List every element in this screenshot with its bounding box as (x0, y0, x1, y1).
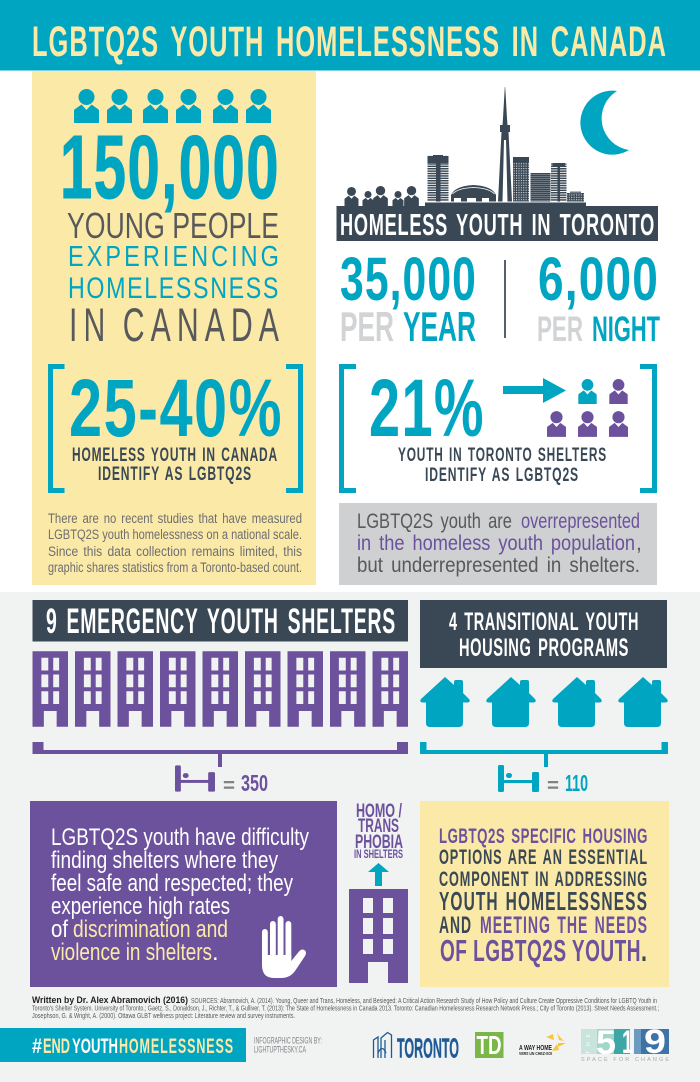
text block: experience high rates (51, 893, 230, 920)
callout: overrepresented (339, 503, 657, 585)
text block: data note: There are no recent studies that have measured (48, 511, 302, 526)
arrow (503, 378, 566, 403)
text: TORONTO (397, 1032, 459, 1064)
heading (32, 600, 408, 642)
stat: 35,000 per year: 35,000 (340, 245, 477, 313)
bed count: 110: 110 (565, 770, 588, 796)
big number: 150,000: 150,000 (60, 118, 280, 218)
icon: bed (175, 765, 215, 792)
text: experiencing: EXPERIENCING (68, 241, 282, 273)
label: homo / trans phobia in shelters: HOMO / (356, 800, 402, 822)
hashtag banner: YOUTH (72, 1035, 118, 1058)
buildings (425, 202, 586, 206)
bed count: 350: = (223, 775, 235, 797)
heading (420, 600, 667, 668)
bed count: 350: 350 (241, 770, 268, 796)
logo: The 519: THE (586, 1033, 592, 1054)
text: young people: YOUNG PEOPLE (67, 205, 279, 246)
callout: housing options: . (641, 933, 647, 968)
logo: A Way Home: VERS UN CHEZ-SOI (519, 1051, 552, 1056)
bed count: 110: = (547, 775, 559, 797)
text block: finding shelters where they (51, 847, 278, 874)
text: homelessness: HOMELESSNESS (68, 272, 280, 305)
bed count: 110 (547, 770, 588, 797)
callout: housing options (420, 801, 669, 987)
callout: overrepresented: , (636, 532, 642, 555)
panel: discrimination in shelters (30, 801, 337, 987)
text block: data note: Since this data collection remains limited, this (48, 544, 302, 559)
text block: violence in shelters (51, 939, 212, 966)
stat: 6,000 per night: PER (537, 310, 583, 349)
stat label: national share (72, 445, 278, 485)
bracket pair (342, 366, 654, 490)
callout: overrepresented: overrepresented (521, 510, 640, 533)
stat: 6,000 per night (537, 245, 660, 349)
text block (51, 824, 309, 966)
stat: 25-40%: 25-40% (69, 363, 283, 454)
text block: of (51, 916, 68, 943)
bracket (420, 742, 668, 767)
design credit: INFOGRAPHIC DESIGN BY: (254, 1036, 322, 1046)
text block: LGBTQ2S youth have difficulty (51, 824, 309, 851)
stat: 6,000 per night: 6,000 (538, 245, 659, 313)
logo: The 519: 9 (644, 1023, 666, 1061)
icon grid: one in five people (547, 379, 628, 437)
hashtag banner: # (32, 1035, 42, 1058)
callout: overrepresented: LGBTQ2S youth are (357, 510, 512, 533)
icon row: four houses (420, 677, 668, 727)
logo: The 519: 5 (596, 1024, 616, 1062)
title banner (0, 0, 700, 71)
panel: emergency shelters: 9 EMERGENCY YOUTH SHELTERS (46, 602, 396, 641)
text block: feel safe and respected; they (51, 870, 293, 897)
text block: data note: graphic shares statistics from a Toronto-based count. (48, 560, 302, 575)
design credit: LIGHTUPTHESKY.CA (254, 1044, 306, 1054)
hashtag banner: HOMELESSNESS (119, 1035, 234, 1058)
label: homo / trans phobia in shelters: IN SHELTERS (354, 849, 403, 861)
stat: 21%: 21% (369, 363, 485, 454)
design credit (254, 1036, 322, 1054)
text block: . (212, 939, 219, 966)
icon: raised hand (262, 916, 306, 978)
logo: A Way Home (519, 1032, 566, 1056)
logo: TD: TD (476, 1030, 502, 1060)
hashtag banner: END (43, 1035, 70, 1058)
logo: The 519: SPACE FOR CHANGE (581, 1057, 669, 1063)
text block: discrimination and (73, 916, 228, 943)
icon row: nine shelters (32, 651, 408, 727)
label: homo / trans phobia in shelters (354, 800, 403, 861)
panel: transitional housing (420, 600, 668, 797)
bed count: 350 (223, 770, 268, 797)
stat: 35,000 per year: YEAR (403, 303, 476, 350)
icon: crescent moon (580, 91, 629, 155)
callout: housing options: AND (439, 912, 472, 939)
bracket pair: national share (50, 366, 300, 490)
credits and sources (32, 995, 659, 1020)
label: homo / trans phobia in shelters: TRANS (358, 815, 399, 837)
stat label: IDENTIFY AS LGBTQ2S (425, 465, 579, 486)
stat: 35,000 per year (340, 245, 477, 350)
callout: overrepresented: but underrepresented in shelters. (357, 554, 640, 577)
icon row: six people (74, 89, 271, 123)
panel: Toronto shelters share (342, 363, 654, 490)
stat label (398, 445, 607, 486)
stat: 35,000 per year: PER (340, 303, 394, 350)
divider (504, 260, 506, 338)
illustration: Toronto skyline with youth (345, 87, 586, 206)
logo: A Way Home: A WAY HOME (519, 1043, 552, 1052)
stat label: national share: IDENTIFY AS LGBTQ2S (98, 464, 252, 485)
panel: national statistics (32, 71, 316, 585)
text block: data note: LGBTQ2S youth homelessness on a national scale. (48, 527, 302, 542)
panel: emergency shelters (32, 600, 408, 797)
stat label: national share: HOMELESS YOUTH IN CANADA (72, 445, 278, 466)
icon: shelter building (349, 889, 408, 983)
stat: 6,000 per night: NIGHT (592, 310, 660, 349)
logo: The 519: 1 (622, 1024, 633, 1060)
icon: bed (498, 765, 539, 792)
bracket (32, 742, 408, 767)
text: in canada: IN CANADA (69, 298, 285, 351)
logo: Toronto (374, 1032, 459, 1064)
youth silhouettes (345, 186, 419, 206)
hashtag banner (0, 1028, 246, 1062)
callout: overrepresented: in the homeless youth population (357, 532, 635, 555)
text block: data note (48, 511, 302, 575)
logo: The 519 (581, 1023, 669, 1063)
label: homo / trans phobia in shelters: PHOBIA (355, 831, 403, 853)
credits and sources: Written by Dr. Alex Abramovich (2016) (32, 995, 188, 1005)
arrow: up (368, 863, 389, 886)
credits and sources: Josephson, G. & Wright, A. (2000). Ottawa GLBT wellness project: Literature review and survey instruments. (32, 1013, 295, 1020)
